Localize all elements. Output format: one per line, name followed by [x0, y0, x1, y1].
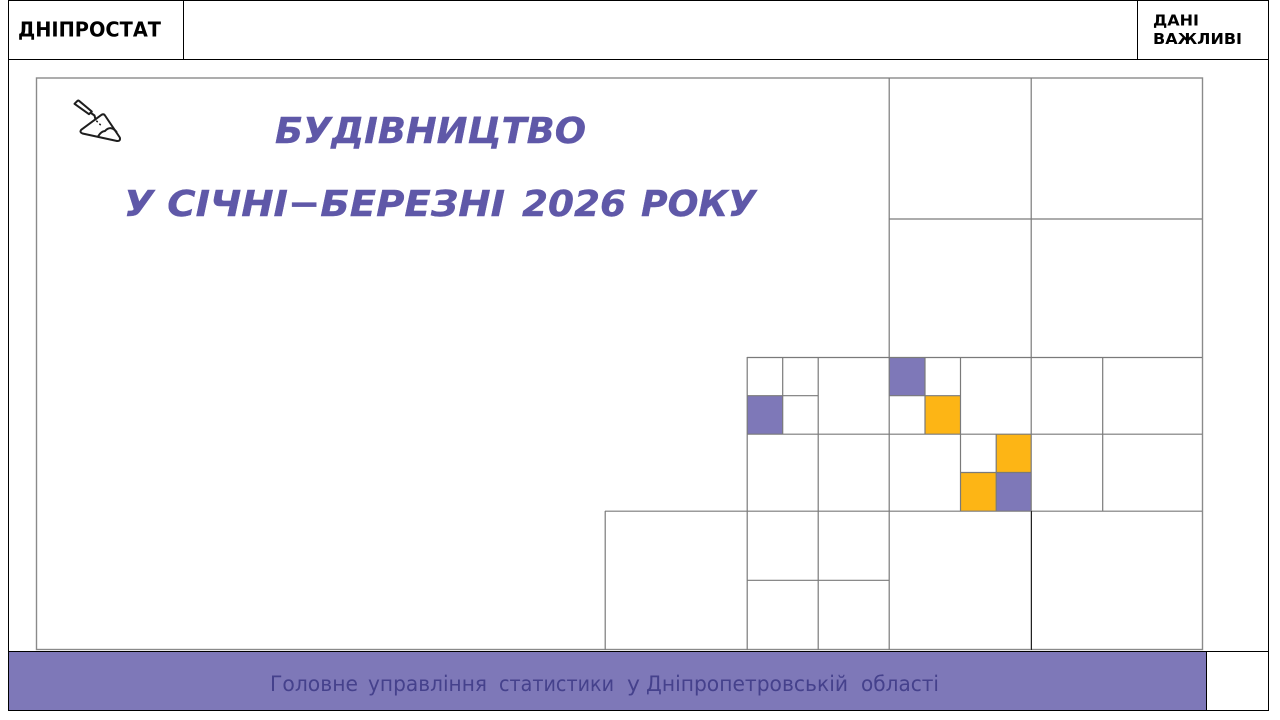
- header tag: ДАНІ: [1153, 12, 1199, 30]
- header bar: [8, 0, 1268, 60]
- title: РОКУ: [641, 184, 758, 225]
- title: У СІЧНІ−БЕРЕЗНІ: [124, 184, 505, 225]
- title: БУДІВНИЦТВО: [275, 111, 586, 152]
- title: [124, 111, 758, 225]
- title: 2026: [522, 184, 626, 225]
- organisation name: Дніпропетровській: [646, 672, 848, 696]
- footer bar: [8, 652, 1268, 710]
- organisation name: Головне: [270, 672, 358, 696]
- frame: [36, 78, 1202, 650]
- organisation name: області: [861, 672, 939, 696]
- organisation name: статистики: [499, 672, 614, 696]
- coloured squares: [747, 357, 1031, 511]
- organisation name: у: [627, 672, 640, 696]
- organisation name: управління: [368, 672, 487, 696]
- organisation name: [270, 672, 939, 696]
- header tag: ВАЖЛИВІ: [1153, 30, 1242, 48]
- icon: trowel: [74, 101, 120, 141]
- brand name: ДНІПРОСТАТ: [18, 18, 161, 42]
- header tag: [1153, 12, 1242, 48]
- decorative grid panel: [36, 78, 1202, 650]
